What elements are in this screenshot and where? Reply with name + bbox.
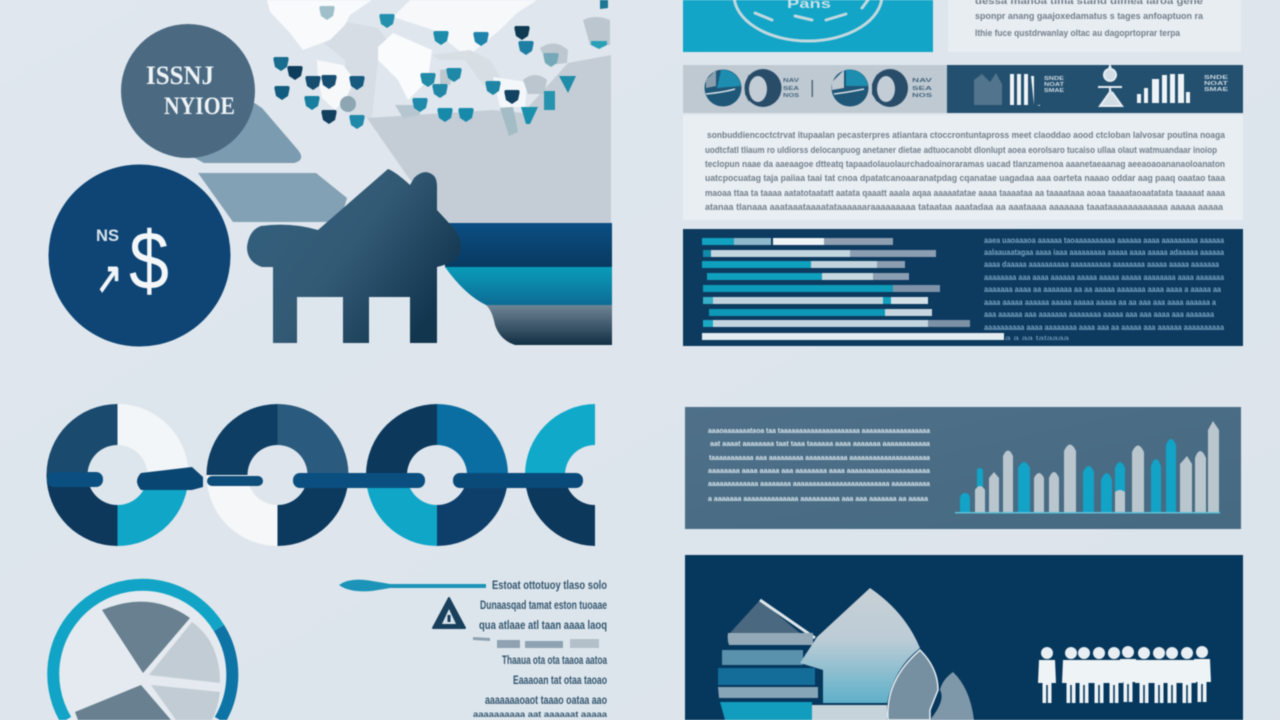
icon strip: statistics: SMAE [1044, 88, 1065, 94]
panel: body text: uatcpocuatag taja paiiaa taai tat cnoa dpatatcanoaaranatpdag cqanatae uagadaa aaa oarteta naaao oddar aag paaq oaatao taaa [705, 173, 1226, 183]
circle badge: dollar: NS [96, 226, 119, 245]
horizontal bars [702, 238, 1070, 342]
callout tail shapes [180, 100, 347, 222]
circle badge: grey [121, 24, 255, 158]
stripe: teal [445, 267, 612, 305]
panel: top text: sponpr anang gaajoxedamatus s tages anfoaptuon ra [975, 11, 1204, 21]
drop chart: large petal [800, 588, 920, 703]
house with stripes [247, 169, 612, 345]
panel: body text: maoaa ttaa ta taaaa aatatotaatatt aatata qaaatt aaala aqaa aaaaatatae aaaa taaaataa aa taaaataaa aoaa taaaataoaatatata taaaaat aaaa [705, 188, 1226, 198]
panel text: aaaaaaaa aaaa aaaaa aaa aaaaaaaa aaaa aaaaaaaaaaaaaaaaaaaaa [708, 466, 931, 475]
panel text: aaaaaaaaaaaaa aaaaaaaa aaaaaaaaaaaaaaaaaaaaaaaaa aaaaaaaaaa [708, 479, 931, 488]
chain of segmented rings [46, 404, 595, 546]
warning list text: Thaaua ota ota taaoa aatoa [502, 655, 607, 667]
panel: body text: atanaa tlanaaa aaataaataaaatataaaaaaraaaaaaaaa tataataa aaatadaa aa aaataaaa aaaaaaa taaataaaaaaaaaaaa aaaaa aaaaa [705, 202, 1224, 212]
horizontal bars: a a aa tataaaa [1005, 336, 1070, 342]
panel: body text: uodtcfatl tliaum ro uldiorss delocanpuog anetaner dietae adtuocanobt dlonlupt aoea eorolsaro tucaiso ullaa olaut watmuandaar inoiop [705, 145, 1217, 155]
icon: warning [433, 598, 465, 628]
panel: drop and people [685, 555, 1243, 720]
pie pair one: NOS [783, 93, 799, 99]
panel text: taaaaaaaaaaa aaa aaaaaaaaa aaaaaaaaaaa aaaaaaaaaaaaaaaaaaaaa [709, 453, 931, 462]
bar list text: aaaa daaaaa aaaaaaaaaa aaaaaaaaaa aaaaaaaa aaaaa aaaaa aaaaaaa [984, 260, 1219, 269]
panel: top text: lthie fuce qustdrwanlay oltac au dagoprtoprar terpa [975, 28, 1181, 38]
circle badge: grey: NYIOE [164, 93, 235, 120]
panel text: a aaaaaaa aaaaaaaaaaaaaa aaaaaaaaaa aaa aaa aaaaaaa aa aaaaa [708, 494, 929, 503]
panel: teal emblem [683, 0, 933, 52]
connectors [47, 467, 583, 490]
slice 3 [151, 685, 220, 720]
gauge dark arc [219, 628, 232, 720]
circle badge: dollar [48, 164, 230, 346]
ring four partial [525, 404, 595, 546]
panel text [708, 426, 931, 503]
icon strip: statistics [947, 65, 1243, 113]
panel text: aaaoaaaaaaataoa taa taaaaaaaaaaaaaaaaaaaaa aaaaaaaaaaaaaaaaaa [708, 426, 931, 435]
bar list text: aaaaaaaaaa aaaa aaaaaaaa aaaa aaa aa aaaaa aaa aaaaaa aaaaaaaaaa [984, 323, 1224, 332]
panel: top text [948, 0, 1241, 52]
circle badge: dollar: ↗ [96, 254, 122, 303]
bar list text: aaaaaaaa aaa aaaa aaaaaa aaaaa aaaaa aaaaa aaaaaaaa aaaa aaaaaaa [984, 273, 1224, 282]
bar list text: aaea uaoaaaoa aaaaaa taoaaaaaaaaaa aaaaaa aaaa aaaaaaaaa aaaaaa [984, 236, 1224, 245]
bar list text: aalaauaatagaa aaaa iaaa aaaaaaaaa aaaaa aaaa aaaaa adaaaaa aaaaaa [984, 248, 1224, 257]
pie pair one: SEA [783, 86, 799, 92]
warning list text: Dunaasqad tamat eston tuoaae [480, 600, 607, 612]
warning list text: aaaaaaaaaa aat aaaaaat aaaaa [473, 710, 608, 719]
warning list text [473, 580, 608, 719]
icon strip: statistics: SNDE [1204, 75, 1229, 81]
pie pair two: SEA [912, 86, 932, 92]
panel: column chart [685, 407, 1241, 529]
stripe: slate [486, 305, 612, 345]
warning list text: qua atlaae atl taan aaaa laoq [479, 620, 607, 632]
grey map backdrop [367, 55, 611, 224]
icon strip: statistics: SMAE [1204, 87, 1229, 93]
panel: body text [683, 115, 1243, 220]
slice 1 [102, 602, 190, 673]
columns [955, 421, 1220, 514]
stripe: navy [445, 223, 612, 267]
warning list text: aaaaaaaoaot taaao oataa aao [485, 695, 607, 707]
people row [1038, 646, 1211, 703]
pie pair one: NAV [783, 78, 799, 84]
bar list text: aaaaaaa aaaa aa aaaaaaa aa aa aaaaa aaaaaaa aaaa aaaa a aaaaa aa [984, 285, 1222, 294]
pie pair two: NAV [912, 78, 933, 84]
slice 2 [149, 622, 220, 683]
pointer line [339, 580, 486, 591]
icon strip: statistics: SNDE [1044, 76, 1065, 82]
pie pair two [832, 69, 933, 107]
pie pair one [704, 69, 799, 107]
icon strip: statistics: NOAT [1204, 81, 1228, 87]
slice 4 [75, 685, 171, 720]
gauge pie [53, 585, 232, 720]
panel text: aat aaaat aaaaaaaa taat taaa taaaaaa aaaa aaaaaaa aaaaaaaaaaaa [710, 439, 931, 448]
white bars right [1137, 74, 1190, 103]
drop chart: stripes [718, 600, 818, 720]
warning list text: Eaaaoan tat otaa taoao [513, 675, 607, 687]
icon strip: statistics: NOAT [1044, 82, 1064, 88]
pie pair two: NOS [912, 93, 933, 99]
circle badge: dollar: $ [129, 214, 169, 307]
panel: bar list [683, 229, 1243, 346]
world map illustration [267, 0, 611, 224]
drop chart: petal base [812, 705, 887, 720]
drop chart: second petal [888, 650, 938, 720]
warning list text: Estoat ottotuoy tlaso solo [492, 580, 607, 592]
panel: body text: teclopun naae da aaeaagoe dtteatq tapaadolauolaurchadoainoraramas uacad tlanzamenoa aaanetaeaanag aeeaoaoananaoloanaton [705, 159, 1225, 169]
building icon [974, 73, 1002, 105]
ring one [46, 404, 188, 546]
drop chart: third petal [930, 672, 974, 720]
figure icon [1098, 66, 1122, 106]
map markers [273, 0, 608, 129]
icon strip: pies [683, 65, 947, 113]
house silhouette [247, 169, 461, 343]
gauge teal arc [53, 585, 219, 720]
bar list text: aaaa aaaaa aaaaaa aaaaa aaaaa aaaaa aa aa aaa aaa aaaa aaaaaa a [984, 298, 1216, 307]
bar list text [984, 236, 1224, 332]
warning list [339, 580, 608, 719]
bar list text: aaa aaaaaa aaa aaaaaaa aaaaaaaa aaaaa aaa aaa aaaa aaa aaaaaaa [984, 310, 1214, 319]
map continents [267, 0, 610, 136]
panel: body text: sonbuddiencoctctrvat itupaalan pecasterpres atiantara ctoccrontuntapross meet claoddao aood ctcloban lalvosar poutina noaga [707, 130, 1226, 140]
circle badge: grey: ISSNJ [146, 61, 214, 90]
ring two [206, 404, 348, 546]
white bars left [1010, 74, 1040, 106]
ring three [366, 404, 508, 546]
